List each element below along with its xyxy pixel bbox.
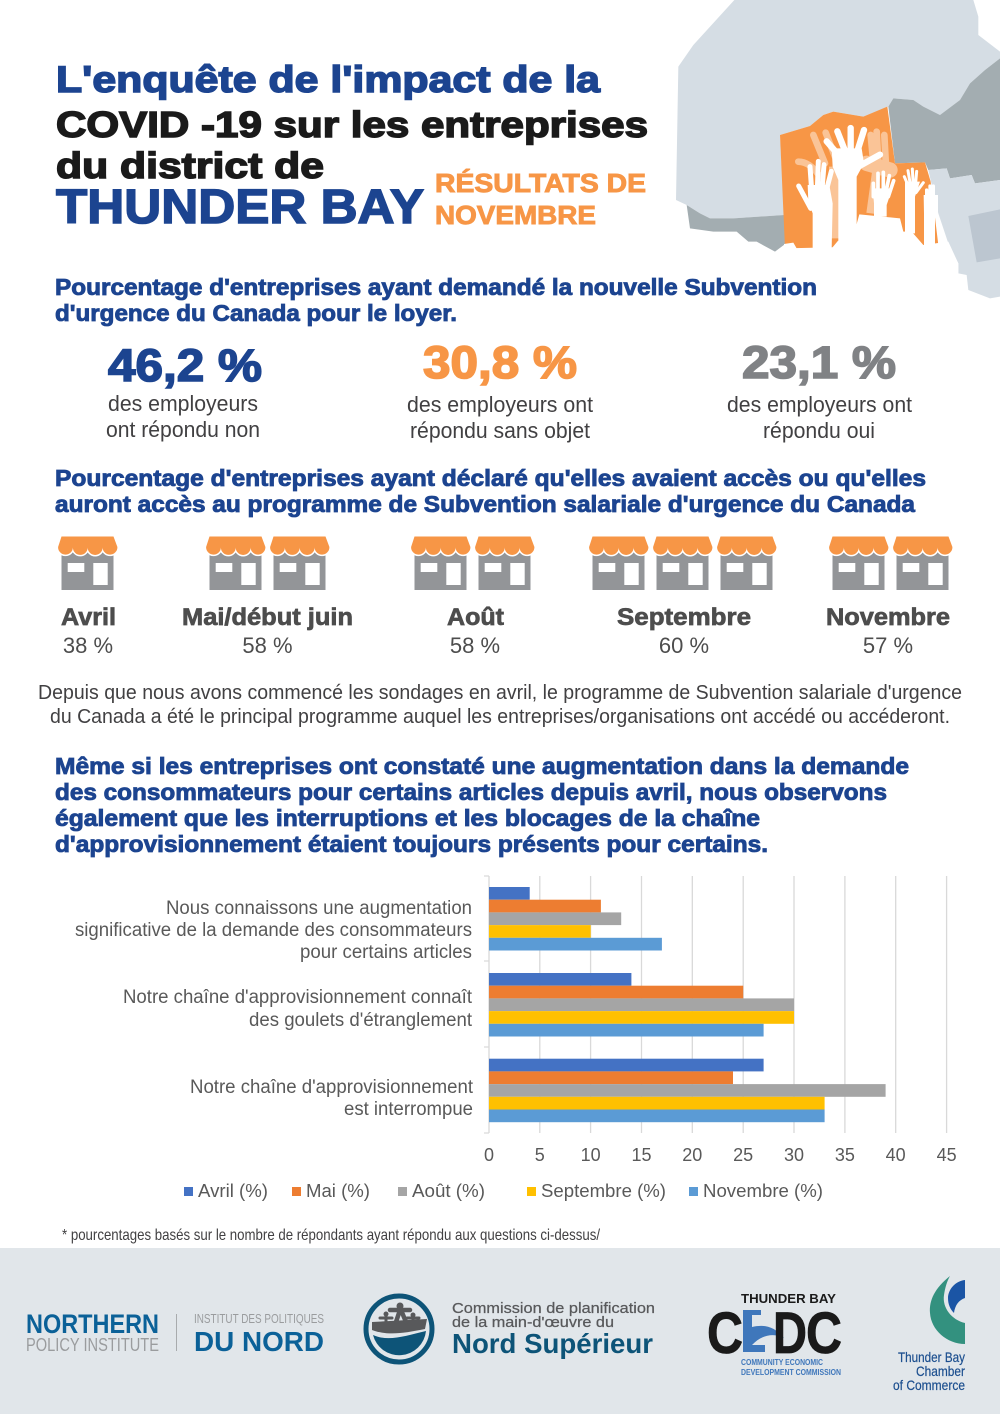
month: Novembre 57 %: Novembre	[826, 604, 950, 631]
x axis numbers: 0	[484, 1145, 494, 1165]
title: COVID -19 sur les entreprises	[56, 104, 648, 145]
logo: Northern Policy Institute: INSTITUT DES POLITIQUES	[194, 1311, 324, 1326]
logo: Northern Policy Institute: DU NORD	[194, 1326, 324, 1357]
heading: wage subsidy	[55, 465, 926, 517]
month: Août 58 %	[411, 536, 534, 658]
logo: Northern Policy Institute: POLICY INSTITUTE	[26, 1335, 159, 1355]
x axis numbers: 30	[784, 1145, 804, 1165]
logo text: Commission de planification	[452, 1300, 655, 1359]
title	[56, 59, 648, 234]
month: Avril 38 %	[58, 536, 117, 658]
stat: 23,1 % oui: des employeurs ont	[727, 392, 912, 417]
logo text: Commission de planification: Nord Supérieur	[452, 1328, 653, 1359]
category labels: pour certains articles	[300, 942, 472, 963]
heading: rent subsidy: d'urgence du Canada pour le loyer.	[55, 300, 457, 326]
stat: 30,8 % sans objet	[407, 337, 593, 443]
stat: 46,2 % non	[106, 340, 262, 442]
subtitle: résultats de novembre: RÉSULTATS DE	[435, 168, 646, 198]
category labels: des goulets d'étranglement	[249, 1010, 473, 1031]
heading: supply chain: d'approvisionnement étaient toujours présents pour certains.	[55, 831, 768, 857]
logo: Thunder Bay Chamber of Commerce: Chamber	[916, 1363, 965, 1379]
logo: workforce planning circle	[366, 1296, 432, 1362]
x axis numbers	[484, 1145, 957, 1165]
series: group 3 bars	[489, 1059, 886, 1122]
logo text: Commission de planification: de la main-d'œuvre du	[452, 1314, 614, 1331]
x axis numbers: 10	[581, 1145, 601, 1165]
logo: CEDC: C	[806, 1301, 842, 1366]
logo: CEDC: THUNDER BAY	[741, 1291, 836, 1306]
legend: Septembre (%)	[541, 1181, 666, 1201]
stat: 30,8 % sans objet: 30,8 %	[423, 337, 577, 388]
month: Août 58 %: 58 %	[450, 633, 500, 658]
month: Avril 38 %: Avril	[61, 604, 116, 631]
legend: Août (%)	[412, 1181, 485, 1201]
subtitle: résultats de novembre	[435, 168, 646, 230]
x axis numbers: 45	[937, 1145, 957, 1165]
stat: 30,8 % sans objet: répondu sans objet	[410, 418, 590, 443]
logo: Northern Policy Institute	[26, 1309, 324, 1357]
category labels: Nous connaissons une augmentation	[166, 898, 472, 919]
logo: CEDC: DEVELOPMENT COMMISSION	[741, 1368, 841, 1377]
logo: CEDC: C	[707, 1301, 743, 1366]
logo: Thunder Bay Chamber of Commerce	[893, 1276, 965, 1393]
x axis numbers: 15	[631, 1145, 652, 1165]
month: Mai/début juin 58 %	[182, 536, 353, 658]
stat: 23,1 % oui: répondu oui	[763, 418, 875, 443]
stat: 23,1 % oui: 23,1 %	[742, 337, 896, 388]
series: group 1 bars	[489, 887, 662, 950]
month: Septembre 60 %: 60 %	[659, 633, 709, 658]
heading: rent subsidy	[55, 274, 817, 326]
month: Août 58 %: Août	[447, 604, 504, 631]
logo: Thunder Bay Chamber of Commerce: of Commerce	[893, 1377, 965, 1393]
stat: 23,1 % oui	[727, 337, 912, 443]
title: L'enquête de l'impact de la	[56, 59, 600, 100]
legend: Novembre (%)	[703, 1181, 823, 1201]
title: du district de	[56, 145, 324, 186]
month: Mai/début juin 58 %: Mai/début juin	[182, 604, 353, 631]
x axis numbers: 35	[835, 1145, 855, 1165]
logo: CEDC: COMMUNITY ECONOMIC	[741, 1358, 823, 1367]
category labels	[75, 898, 474, 1120]
category labels: est interrompue	[344, 1099, 473, 1120]
category labels: Notre chaîne d'approvisionnement connaît	[123, 987, 473, 1008]
stat: 46,2 % non: des employeurs	[108, 391, 258, 416]
footer band	[0, 1248, 1000, 1414]
heading: supply chain	[55, 753, 909, 857]
legend	[184, 1181, 823, 1201]
month: Novembre 57 %: 57 %	[863, 633, 913, 658]
logo: CEDC	[707, 1291, 842, 1377]
stat: 30,8 % sans objet: des employeurs ont	[407, 392, 593, 417]
logo: Northern Policy Institute: NORTHERN	[26, 1309, 159, 1339]
heading: supply chain: également que les interruptions et les blocages de la chaîne	[55, 805, 760, 831]
paragraph	[38, 682, 962, 728]
legend: Mai (%)	[306, 1181, 370, 1201]
stat: 46,2 % non: ont répondu non	[106, 417, 260, 442]
heading: rent subsidy: Pourcentage d'entreprises ayant demandé la nouvelle Subvention	[55, 274, 817, 300]
bar chart	[75, 876, 957, 1165]
legend: Avril (%)	[198, 1181, 268, 1201]
stat: 46,2 % non: 46,2 %	[108, 340, 262, 391]
category labels: significative de la demande des consommateurs	[75, 920, 472, 941]
subtitle: résultats de novembre: NOVEMBRE	[435, 200, 596, 230]
x axis numbers: 40	[886, 1145, 906, 1165]
logo: Thunder Bay Chamber of Commerce: Thunder Bay	[898, 1349, 965, 1365]
paragraph: du Canada a été le principal programme auquel les entreprises/organisations ont accédé ou accéderont.	[50, 706, 950, 728]
category labels: Notre chaîne d'approvisionnement	[190, 1077, 474, 1098]
heading: wage subsidy: Pourcentage d'entreprises ayant déclaré qu'elles avaient accès ou qu'elles	[55, 465, 926, 491]
month: Septembre 60 %: Septembre	[617, 604, 751, 631]
heading: supply chain: des consommateurs pour certains articles depuis avril, nous observons	[55, 779, 887, 805]
series: group 2 bars	[489, 973, 794, 1036]
paragraph: Depuis que nous avons commencé les sondages en avril, le programme de Subvention salariale d'urgence	[38, 682, 962, 704]
footnote: * pourcentages basés sur le nombre de répondants ayant répondu aux questions ci-dessus/	[62, 1227, 600, 1244]
heading: wage subsidy: auront accès au programme de Subvention salariale d'urgence du Canada	[55, 491, 915, 517]
month: Septembre 60 %	[589, 536, 776, 658]
x axis numbers: 5	[535, 1145, 545, 1165]
heading: supply chain: Même si les entreprises ont constaté une augmentation dans la demande	[55, 753, 909, 779]
month: Avril 38 %: 38 %	[63, 633, 113, 658]
logo: CEDC: D	[773, 1301, 807, 1366]
title: THUNDER BAY	[56, 181, 424, 234]
month: Novembre 57 %	[826, 536, 952, 658]
logo text: Commission de planification: Commission de planification	[452, 1300, 655, 1317]
month: Mai/début juin 58 %: 58 %	[242, 633, 293, 658]
x axis numbers: 20	[682, 1145, 702, 1165]
x axis numbers: 25	[733, 1145, 753, 1165]
background map with raised hands	[676, 0, 1000, 298]
